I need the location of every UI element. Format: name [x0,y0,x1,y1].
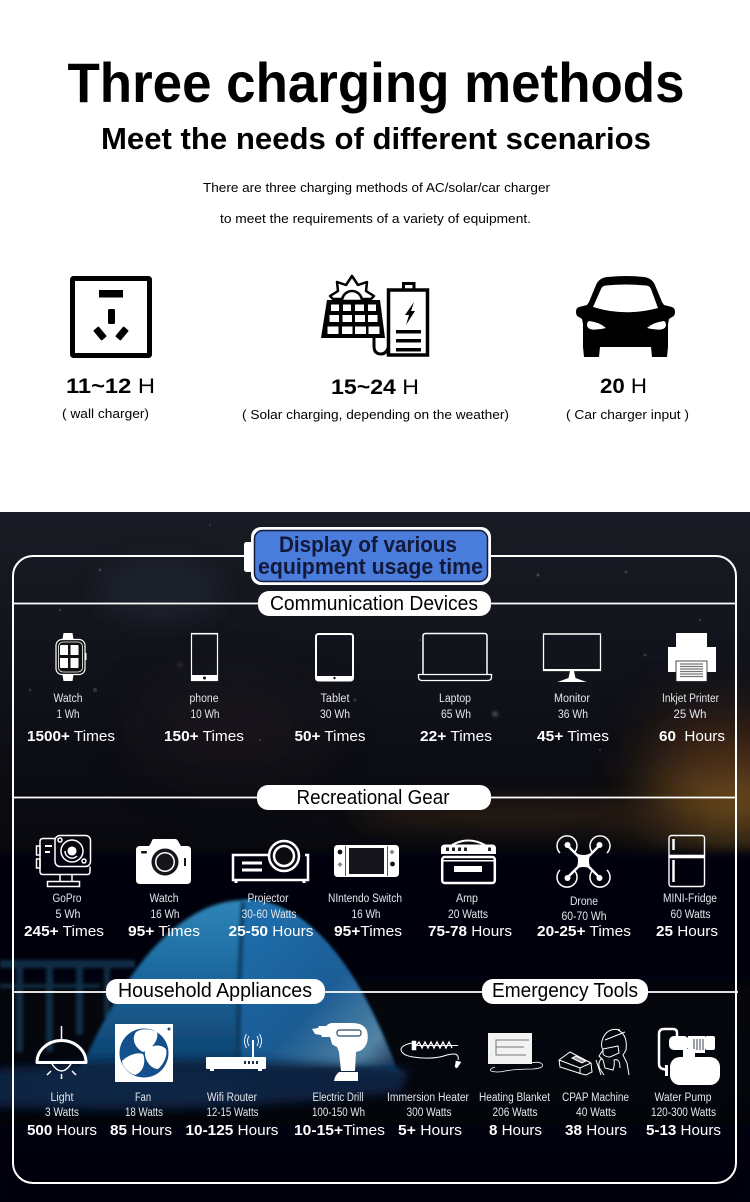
device: Watch: 1500+ Times [27,728,115,745]
icon: projector [233,841,308,883]
icon: amplifier [441,840,496,883]
device: Immersion Heater: 300 Watts [406,1107,452,1119]
device: GoPro [24,836,104,940]
heading: battery-shaped title badge: equipment usage time [258,554,483,579]
device: Projector: Projector [248,893,289,905]
device: Light [27,1026,97,1139]
device: CPAP Machine: 40 Watts [576,1107,616,1119]
device: Nintendo Switch: 95+Times [334,923,402,940]
device: Wifi Router: 10-125 Hours [186,1122,278,1139]
device: Heating Blanket: 8 Hours [489,1122,542,1139]
icon: smartwatch [56,633,86,681]
icon: heating blanket [488,1033,543,1072]
device: Light: Light [50,1092,74,1104]
device: Laptop: Laptop [439,693,471,705]
device: Inkjet Printer: 25 Wh [674,709,706,721]
device: CPAP Machine: CPAP Machine [562,1092,629,1104]
title: Three charging methods [68,51,684,114]
device: Amp: 20 Watts [448,909,488,921]
icon: camera [136,839,191,884]
icon: game console [334,845,399,877]
intro text [203,180,551,226]
icon: router [206,1034,266,1071]
device: Tablet [294,634,365,745]
device: phone: phone [190,693,218,705]
device: Electric Drill: 10-15+Times [294,1122,385,1139]
device: Mini-Fridge: MINI-Fridge [663,893,717,905]
device: Immersion Heater: 5+ Hours [398,1122,462,1139]
device: Tablet: 30 Wh [320,709,350,721]
device: Nintendo Switch [328,845,402,940]
device: Watch (camera) [128,839,200,940]
device: Electric Drill: Electric Drill [312,1092,364,1104]
panel: night camping photo background [0,512,750,1202]
device: Mini-Fridge [656,836,718,940]
heading: battery-shaped title badge [244,527,491,585]
label: car charger time: 20 H [600,375,647,398]
device: Water Pump: Water Pump [654,1092,712,1104]
device: Projector [228,841,314,940]
device: Amp [428,840,512,940]
device: Laptop: 65 Wh [441,709,471,721]
device: Laptop: 22+ Times [420,728,492,745]
label: wall charger time [62,375,155,421]
device: Laptop [418,634,492,745]
icon: phone [191,633,218,681]
device: Mini-Fridge: 25 Hours [656,923,718,940]
icon: water pump [659,1029,720,1085]
icon: drone [557,836,610,887]
device: Wifi Router: 12-15 Watts [206,1107,259,1119]
device: Heating Blanket [479,1033,551,1139]
device: Inkjet Printer [659,633,725,745]
panel: top section background [0,0,750,512]
device: GoPro: 245+ Times [24,923,104,940]
device: Watch (camera): 16 Wh [150,909,180,921]
device: GoPro: GoPro [52,893,82,905]
device: Fan: 18 Watts [125,1107,163,1119]
device: Nintendo Switch: 16 Wh [352,909,380,921]
icon: CPAP machine and mask [559,1029,629,1075]
device: Light: 3 Watts [45,1107,79,1119]
device: Amp: 75-78 Hours [428,923,512,940]
divider lines [13,604,738,992]
icon: tablet [316,634,353,680]
device: Mini-Fridge: 60 Watts [670,909,711,921]
icon: action camera [36,836,90,886]
label: wall charger time: ( wall charger) [62,406,149,421]
device: phone: 10 Wh [190,709,220,721]
device: Drone: Drone [570,896,598,908]
device: Light: 500 Hours [27,1122,97,1139]
icon: monitor [543,633,601,682]
label: solar charging time: 15~24 H [331,376,419,399]
device: Projector: 30-60 Watts [242,909,297,921]
device: Fan: Fan [135,1092,151,1104]
label: car charger time [566,375,689,422]
heading: Emergency Tools: Emergency Tools [492,980,638,1002]
device: Inkjet Printer: Inkjet Printer [662,693,719,705]
device: Fan [110,1024,173,1139]
device: Projector: 25-50 Hours [228,923,314,940]
device: phone: 150+ Times [164,728,244,745]
panel: rounded frame [13,556,736,1183]
device: Heating Blanket: Heating Blanket [479,1092,551,1104]
device: Watch (camera): Watch [150,893,178,905]
icon: car [576,276,675,357]
icon: cordless drill [312,1023,368,1081]
device: Nintendo Switch: NIntendo Switch [328,893,402,905]
heading: Household Appliances: Household Appliances [118,980,312,1002]
device: Monitor: 36 Wh [558,709,588,721]
icon: pendant lamp [37,1026,86,1079]
device: Water Pump: 120-300 Watts [651,1107,716,1119]
icon: mini fridge [669,836,704,886]
intro text: to meet the requirements of a variety of equipment. [220,211,531,226]
device: Wifi Router: Wifi Router [207,1092,257,1104]
label: solar charging time: ( Solar charging, depending on the weather) [242,407,509,422]
device: Drone: 20-25+ Times [537,923,631,940]
device: CPAP Machine [559,1029,629,1139]
label: wall charger time: 11~12 H [66,375,155,398]
device: Monitor: Monitor [554,693,590,705]
icon: box fan [115,1024,173,1082]
icon: solar panel and battery [321,276,428,355]
device: GoPro: 5 Wh [56,909,80,921]
device: Monitor: 45+ Times [537,728,609,745]
icon: wall socket [72,278,150,356]
device: Tablet: 50+ Times [294,728,365,745]
device: Watch (camera): 95+ Times [128,923,200,940]
device: Watch: 1 Wh [56,709,80,721]
device: Tablet: Tablet [320,693,350,705]
icon: laptop [418,634,492,680]
device: Electric Drill [294,1023,385,1139]
heading: Recreational Gear: Recreational Gear [296,787,450,809]
device: Water Pump: 5-13 Hours [646,1122,721,1139]
device: Fan: 85 Hours [110,1122,172,1139]
device: Immersion Heater: Immersion Heater [387,1092,469,1104]
device: Heating Blanket: 206 Watts [492,1107,538,1119]
device: Watch [27,633,115,745]
device: Immersion Heater [387,1041,469,1139]
device: phone [164,633,244,745]
device: Drone [537,836,631,940]
device: Monitor [537,633,609,745]
intro text: There are three charging methods of AC/solar/car charger [203,180,551,195]
device: Inkjet Printer: 60 Hours [659,728,725,745]
device: Drone: 60-70 Wh [562,911,606,923]
label: solar charging time [242,376,509,422]
device: CPAP Machine: 38 Hours [565,1122,627,1139]
icon: immersion heater [401,1041,461,1068]
device: Wifi Router [186,1034,278,1139]
device: Watch: Watch [54,693,82,705]
icon: printer [668,633,716,682]
device: Water Pump [646,1029,721,1139]
subtitle: Meet the needs of different scenarios [101,121,651,156]
heading: Recreational Gear [257,785,491,810]
label: car charger time: ( Car charger input ) [566,407,689,422]
device: Amp: Amp [456,893,478,905]
heading: Communication Devices: Communication Devices [270,593,478,615]
heading: battery-shaped title badge: Display of various [279,532,457,557]
device: Electric Drill: 100-150 Wh [312,1107,365,1119]
